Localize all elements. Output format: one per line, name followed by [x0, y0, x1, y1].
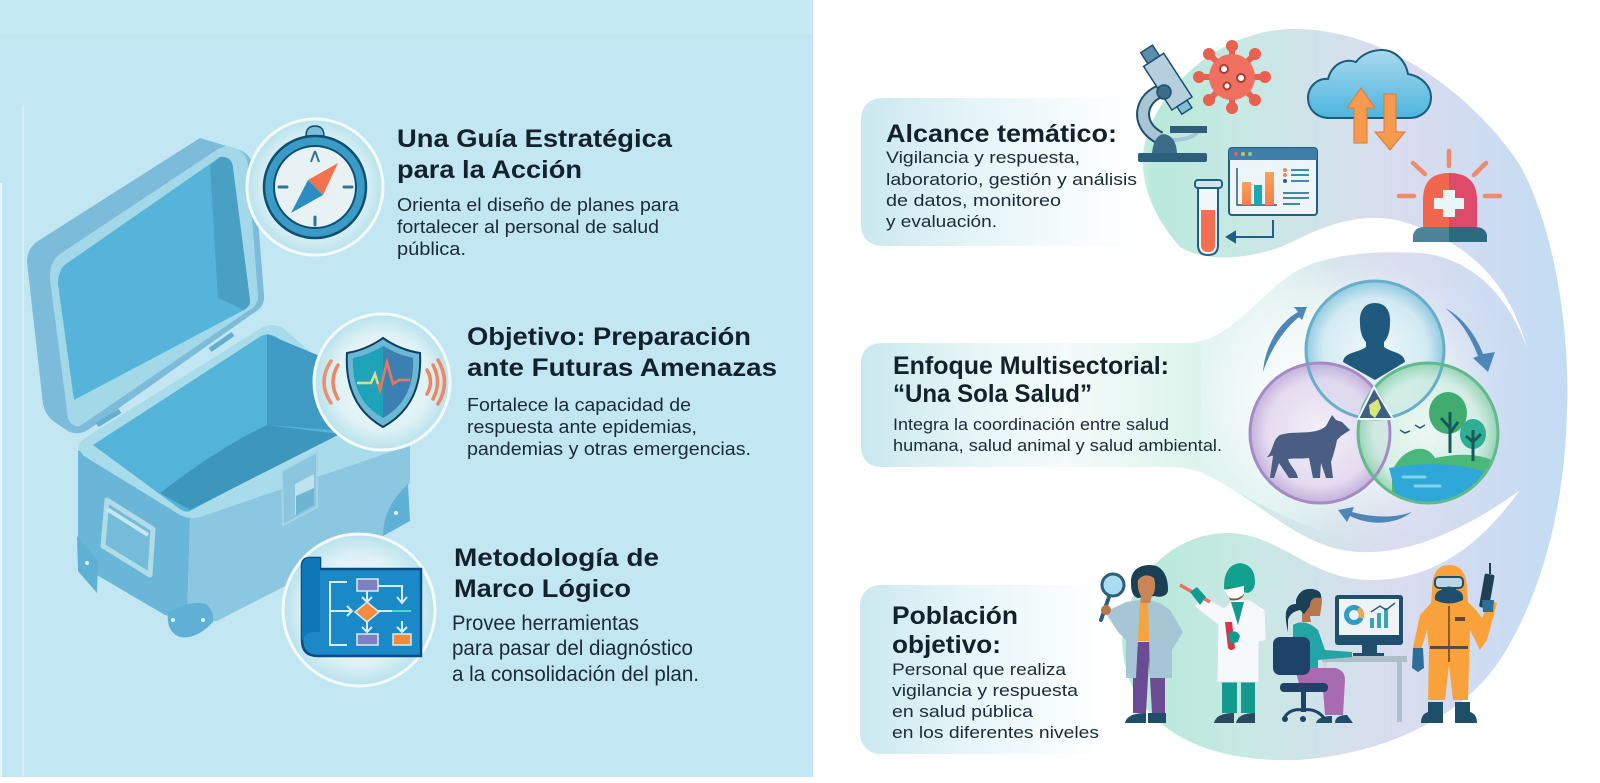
- arrow: cycle upper left: [1263, 307, 1307, 372]
- icon: virus: [1193, 40, 1271, 114]
- heading: Metodología de: [454, 544, 659, 572]
- figure: hazmat responder with radio: [1412, 563, 1497, 723]
- chart: one health venn diagram: [1249, 281, 1500, 523]
- corner caps: [77, 484, 410, 637]
- arrow: dashboard to tube: [1227, 220, 1273, 242]
- figure: investigator with magnifier: [1101, 565, 1183, 723]
- figure: analyst at computer: [1273, 589, 1407, 723]
- background: right crescent blob: [1122, 29, 1567, 760]
- arrow: cycle bottom: [1338, 507, 1412, 523]
- side handle: [103, 500, 153, 575]
- heading: Alcance temático:: [886, 120, 1117, 148]
- heading: Marco Lógico: [454, 575, 631, 603]
- text block: metodología: [452, 544, 699, 686]
- icon: dashboard chart window: [1229, 148, 1317, 215]
- arrow: cycle upper right: [1445, 308, 1495, 372]
- body: Fortalece la capacidad de: [467, 394, 691, 415]
- body: de datos, monitoreo: [886, 191, 1061, 210]
- body: Provee herramientas: [452, 612, 639, 635]
- heading: “Una Sola Salud”: [893, 380, 1092, 408]
- circle: environment: [1360, 364, 1496, 502]
- body: en los diferentes niveles: [892, 723, 1099, 742]
- body: vigilancia y respuesta: [892, 681, 1079, 700]
- panel: alcance temático box: [861, 98, 1153, 246]
- circle: human: [1306, 281, 1444, 419]
- hinges: [97, 334, 233, 425]
- box base: [77, 325, 410, 637]
- box lid: [27, 138, 264, 433]
- body: pandemias y otras emergencias.: [467, 438, 751, 459]
- body: humana, salud animal y salud ambiental.: [893, 436, 1222, 455]
- front latch: [282, 452, 317, 525]
- body: y evaluación.: [886, 212, 997, 231]
- body: a la consolidación del plan.: [452, 663, 699, 686]
- panel: población objetivo box: [860, 585, 1122, 754]
- rings: [1250, 281, 1498, 503]
- figure: lab technician: [1180, 563, 1266, 723]
- icon: emergency alarm light: [1399, 151, 1500, 242]
- circle: animal: [1249, 362, 1391, 504]
- icon: compass in circle: [247, 119, 383, 255]
- body: Orienta el diseño de planes para: [397, 194, 680, 215]
- icon: test tube: [1195, 180, 1222, 255]
- heading: Enfoque Multisectorial:: [893, 352, 1169, 380]
- body: laboratorio, gestión y análisis: [886, 170, 1137, 189]
- icon: microscope: [1137, 42, 1207, 162]
- body: Integra la coordinación entre salud: [893, 415, 1169, 434]
- heading: Una Guía Estratégica: [397, 125, 673, 153]
- body: respuesta ante epidemias,: [467, 416, 697, 437]
- body: para pasar del diagnóstico: [452, 637, 693, 660]
- icon: shield with heartbeat in circle: [314, 314, 450, 450]
- heading: Objetivo: Preparación: [467, 323, 751, 351]
- heading: Población: [892, 602, 1018, 630]
- body: en salud pública: [892, 702, 1034, 721]
- body: Personal que realiza: [892, 660, 1067, 679]
- heading: objetivo:: [892, 631, 1001, 659]
- panel: left blue background: [0, 0, 813, 777]
- heading: ante Futuras Amenazas: [467, 354, 777, 382]
- panel: enfoque multisectorial box: [861, 343, 1222, 467]
- icon: cloud with arrows: [1308, 50, 1431, 150]
- illustration: open blue cooler box: [27, 138, 410, 637]
- body: pública.: [397, 238, 466, 259]
- icon: logframe blueprint flowchart in circle: [283, 534, 435, 686]
- heading: para la Acción: [397, 156, 582, 184]
- body: fortalecer al personal de salud: [397, 216, 659, 237]
- text block: objetivo: [467, 323, 777, 459]
- text block: guía estratégica: [397, 125, 680, 259]
- body: Vigilancia y respuesta,: [886, 148, 1080, 167]
- center intersection: [1358, 387, 1393, 419]
